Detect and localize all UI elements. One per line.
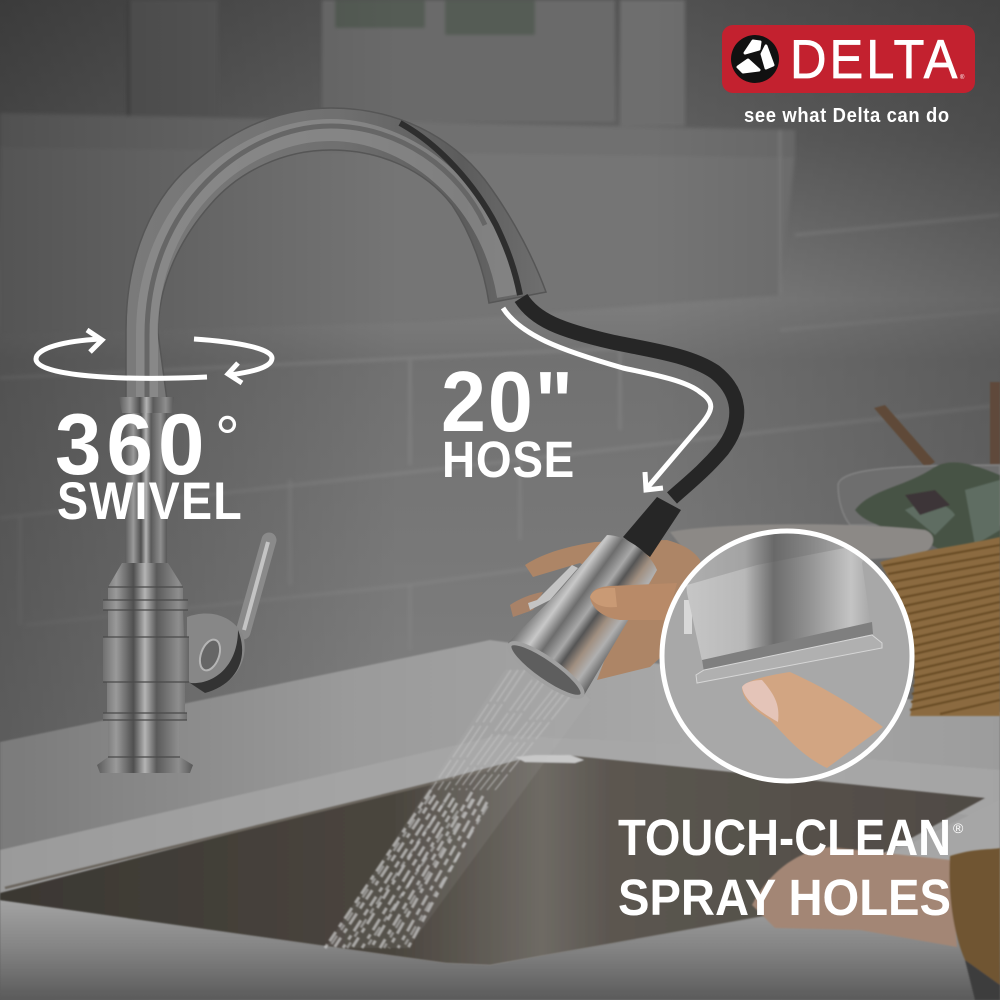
faucet body	[97, 563, 193, 773]
logo red badge	[722, 25, 975, 93]
spout sheen	[147, 130, 508, 400]
thumbnail	[590, 588, 617, 607]
person's hand behind spray head	[525, 540, 705, 680]
body ring lines	[103, 587, 189, 757]
spout dark reflection	[400, 123, 520, 295]
spout band	[147, 126, 485, 400]
tagline: see what Delta can do	[744, 105, 949, 127]
registered mark: ®	[960, 74, 965, 81]
handle hub	[187, 613, 245, 693]
wand button	[528, 565, 578, 610]
Delta logo	[722, 25, 975, 127]
spray head	[504, 497, 681, 704]
label: 360 swivel: 360	[55, 396, 204, 492]
braided hose	[521, 298, 737, 498]
label: 360 swivel: °	[215, 404, 240, 473]
lever handle	[243, 540, 269, 632]
sink basin	[0, 755, 985, 965]
label: 360 swivel	[55, 396, 242, 531]
inset finger	[742, 672, 883, 768]
faucet	[97, 108, 546, 773]
inset neck band	[702, 622, 873, 672]
label: touch-clean spray holes: ®	[953, 820, 964, 836]
hub detail	[196, 637, 224, 673]
logo wordmark: DELTA	[790, 29, 958, 90]
faucet spout	[126, 108, 546, 400]
hose connector	[623, 497, 681, 557]
lower fingers	[510, 592, 543, 617]
inset metal rim	[696, 635, 882, 683]
logo emblem	[731, 35, 779, 83]
handle highlight	[244, 542, 268, 630]
counter	[0, 640, 1000, 1000]
sweater sleeve	[880, 537, 1000, 716]
label: touch-clean spray holes: SPRAY HOLES	[618, 869, 951, 926]
inset fingernail	[742, 680, 778, 722]
spray water	[325, 670, 590, 948]
label: 20 inch hose: HOSE	[442, 432, 574, 489]
label: touch-clean spray holes	[618, 809, 964, 926]
label: 20 inch hose: 20"	[441, 354, 573, 449]
person's lower hand and sleeve	[752, 847, 1000, 1000]
inset tab	[684, 600, 692, 634]
hub shadow	[190, 630, 242, 693]
stem collar	[119, 397, 174, 413]
nozzle ring	[504, 636, 588, 704]
inset circle: touch-clean spray holes closeup	[662, 520, 912, 781]
thumb over wand	[590, 583, 677, 620]
inset metal sprayer	[686, 534, 865, 662]
spray wand	[508, 535, 657, 697]
label: 360 swivel: SWIVEL	[57, 471, 242, 531]
background: salad bowl and spoon	[670, 382, 1000, 570]
label: touch-clean spray holes: TOUCH-CLEAN	[618, 809, 951, 866]
faucet stem	[125, 400, 167, 565]
swivel arrows icon	[36, 330, 272, 383]
hose length arrow	[503, 308, 711, 490]
inset shoulder shade	[688, 534, 844, 585]
